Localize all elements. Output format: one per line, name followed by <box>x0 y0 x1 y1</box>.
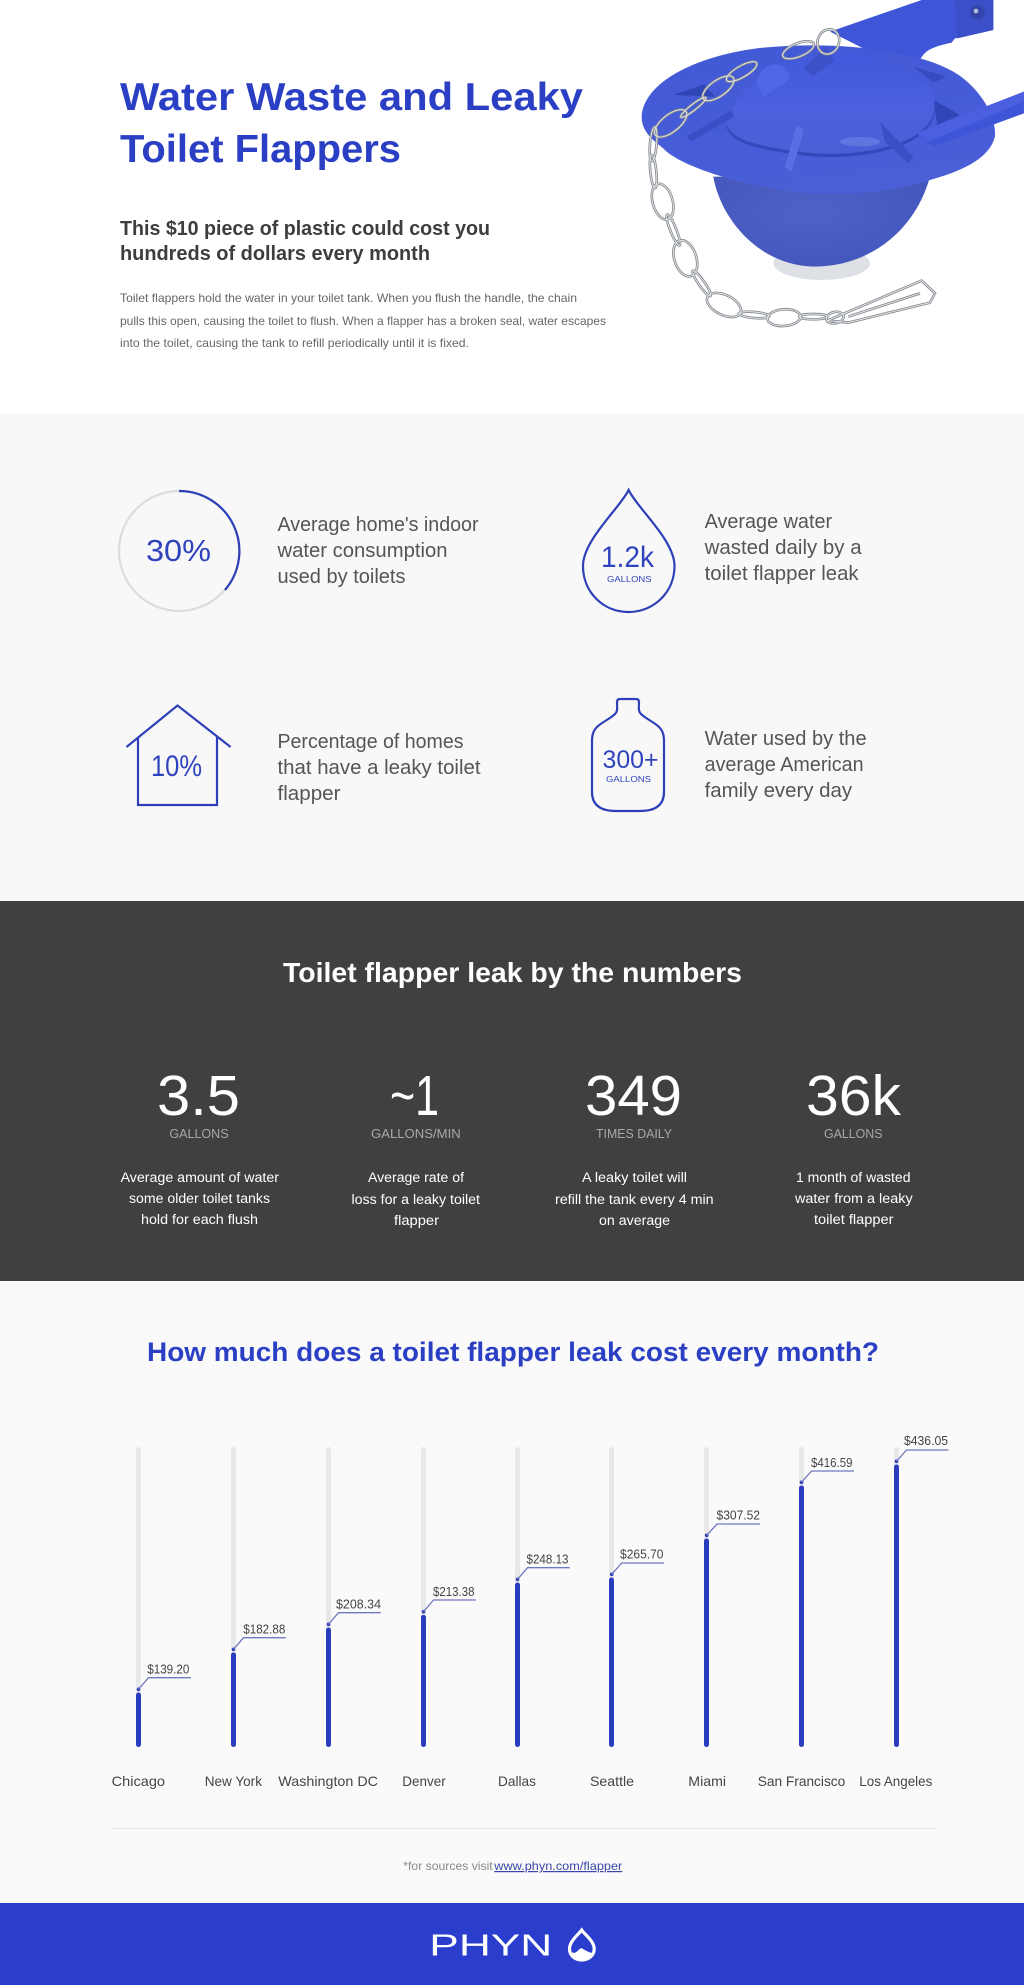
icon: drop <box>570 1930 594 1961</box>
icon: water drop <box>583 490 674 612</box>
description: hold for each flush <box>141 1212 258 1227</box>
description: Percentage of homes <box>278 731 464 753</box>
bar: Seattle: $265.70 <box>620 1546 664 1562</box>
intro paragraph: pulls this open, causing the toilet to flush. When a flapper has a broken seal, water escapes <box>120 314 606 328</box>
value: 36k <box>806 1064 902 1128</box>
description <box>276 514 479 588</box>
bar: San Francisco <box>799 1447 854 1747</box>
source note <box>403 1859 622 1873</box>
title: Water Waste and Leaky <box>120 76 583 119</box>
bar: Seattle <box>609 1447 664 1747</box>
bar: San Francisco: $416.59 <box>811 1455 852 1470</box>
stat: 1.2k gallons wasted <box>583 490 862 612</box>
bar: Denver: $213.38 <box>433 1584 474 1599</box>
icon: house <box>126 706 231 805</box>
bar: Denver <box>421 1447 476 1747</box>
description: Average water <box>705 511 832 533</box>
bar: New York: $182.88 <box>243 1621 285 1636</box>
illustration: toilet flapper with chain <box>642 0 1024 327</box>
description: water from a leaky <box>794 1191 913 1206</box>
chart: city labels: New York <box>205 1773 263 1789</box>
description <box>705 728 867 802</box>
bar chart: monthly leak cost by city <box>136 1433 948 1747</box>
subtitle <box>120 218 490 265</box>
section: intro background <box>0 0 1024 414</box>
number column: 36k gallons <box>794 1064 913 1227</box>
bar: Chicago <box>136 1447 191 1747</box>
description <box>352 1170 480 1228</box>
section: chart background <box>0 1281 1024 1903</box>
description: family every day <box>705 780 852 802</box>
source note: *for sources visit <box>403 1859 493 1873</box>
description: A leaky toilet will <box>582 1170 687 1185</box>
section: numbers background <box>0 901 1024 1281</box>
title <box>120 76 583 171</box>
chart: city labels: Miami <box>688 1773 726 1789</box>
chart: city labels: San Francisco <box>758 1773 846 1789</box>
wordmark: PHYN <box>429 1928 552 1963</box>
title: Toilet Flappers <box>120 128 401 171</box>
bar: Washington DC: $208.34 <box>336 1596 381 1611</box>
subtitle: hundreds of dollars every month <box>120 243 430 265</box>
value: ~1 <box>390 1064 439 1128</box>
intro paragraph: Toilet flappers hold the water in your toilet tank. When you flush the handle, the chain <box>120 291 577 305</box>
description: on average <box>599 1213 670 1228</box>
chart: city labels: Chicago <box>112 1773 165 1789</box>
intro paragraph: into the toilet, causing the tank to refill periodically until it is fixed. <box>120 336 469 350</box>
bar: Miami: $307.52 <box>716 1508 760 1522</box>
bar: Miami <box>704 1447 760 1747</box>
chart: city labels: Los Angeles <box>859 1773 932 1789</box>
bar: Dallas: $248.13 <box>526 1552 568 1566</box>
section: footer background <box>0 1903 1024 1985</box>
unit: GALLONS/MIN <box>371 1127 461 1141</box>
description <box>704 511 862 585</box>
value: 10% <box>151 750 202 783</box>
number column: ~1 gallons per minute <box>352 1064 480 1228</box>
unit: GALLONS <box>607 574 652 584</box>
description: refill the tank every 4 min <box>555 1192 714 1207</box>
heading: cost chart: How much does a toilet flapper leak cost every month? <box>147 1337 879 1367</box>
description: that have a leaky toilet <box>278 757 481 779</box>
description: average American <box>705 754 864 776</box>
description: water consumption <box>276 540 448 562</box>
description: used by toilets <box>278 566 406 588</box>
unit: GALLONS <box>606 774 651 784</box>
bar: Chicago: $139.20 <box>147 1661 189 1676</box>
value: 3.5 <box>157 1064 240 1128</box>
chart: city labels: Denver <box>402 1773 446 1789</box>
value: 300+ <box>602 746 658 774</box>
icon: progress ring <box>119 491 239 611</box>
description: 1 month of wasted <box>796 1170 910 1185</box>
number column: 3.5 gallons <box>121 1064 280 1227</box>
description <box>555 1170 714 1228</box>
source note: www.phyn.com/flapper <box>493 1859 622 1873</box>
icon: water jug <box>592 699 664 811</box>
chart: city labels: Dallas <box>498 1773 536 1789</box>
description: toilet flapper <box>814 1212 894 1227</box>
unit: TIMES DAILY <box>596 1127 673 1141</box>
intro paragraph <box>120 291 606 350</box>
description: Water used by the <box>705 728 867 750</box>
description: Average rate of <box>368 1170 464 1185</box>
subtitle: This $10 piece of plastic could cost you <box>120 218 490 240</box>
stat: 10% of homes <box>126 706 481 805</box>
number column: 349 times daily <box>555 1064 714 1228</box>
description <box>278 731 481 805</box>
description: flapper <box>394 1213 440 1228</box>
unit: GALLONS <box>169 1127 229 1141</box>
stat: 30% indoor water <box>119 491 479 611</box>
stat: 300+ gallons used <box>592 699 867 811</box>
description: toilet flapper leak <box>705 563 860 585</box>
heading: by the numbers: Toilet flapper leak by the numbers <box>283 957 742 988</box>
description: flapper <box>278 783 341 805</box>
description: wasted daily by a <box>704 537 862 559</box>
bar: Dallas <box>515 1447 570 1747</box>
bar: New York <box>231 1447 286 1747</box>
description: Average amount of water <box>121 1170 280 1185</box>
value: 30% <box>146 533 211 568</box>
bar: Los Angeles: $436.05 <box>904 1433 948 1448</box>
chart: city labels: Washington DC <box>278 1773 378 1789</box>
bar: Los Angeles <box>894 1433 948 1747</box>
chart: city labels <box>112 1773 932 1789</box>
unit: GALLONS <box>824 1127 882 1141</box>
section: stats background <box>0 414 1024 901</box>
description <box>794 1170 913 1227</box>
value: 349 <box>585 1064 682 1128</box>
description: loss for a leaky toilet <box>352 1192 480 1207</box>
description <box>121 1170 280 1227</box>
logo: Phyn <box>429 1928 594 1963</box>
description: some older toilet tanks <box>129 1191 270 1206</box>
chart: city labels: Seattle <box>590 1773 634 1789</box>
value: 1.2k <box>601 541 655 574</box>
bar: Washington DC <box>326 1447 381 1747</box>
description: Average home's indoor <box>278 514 479 536</box>
